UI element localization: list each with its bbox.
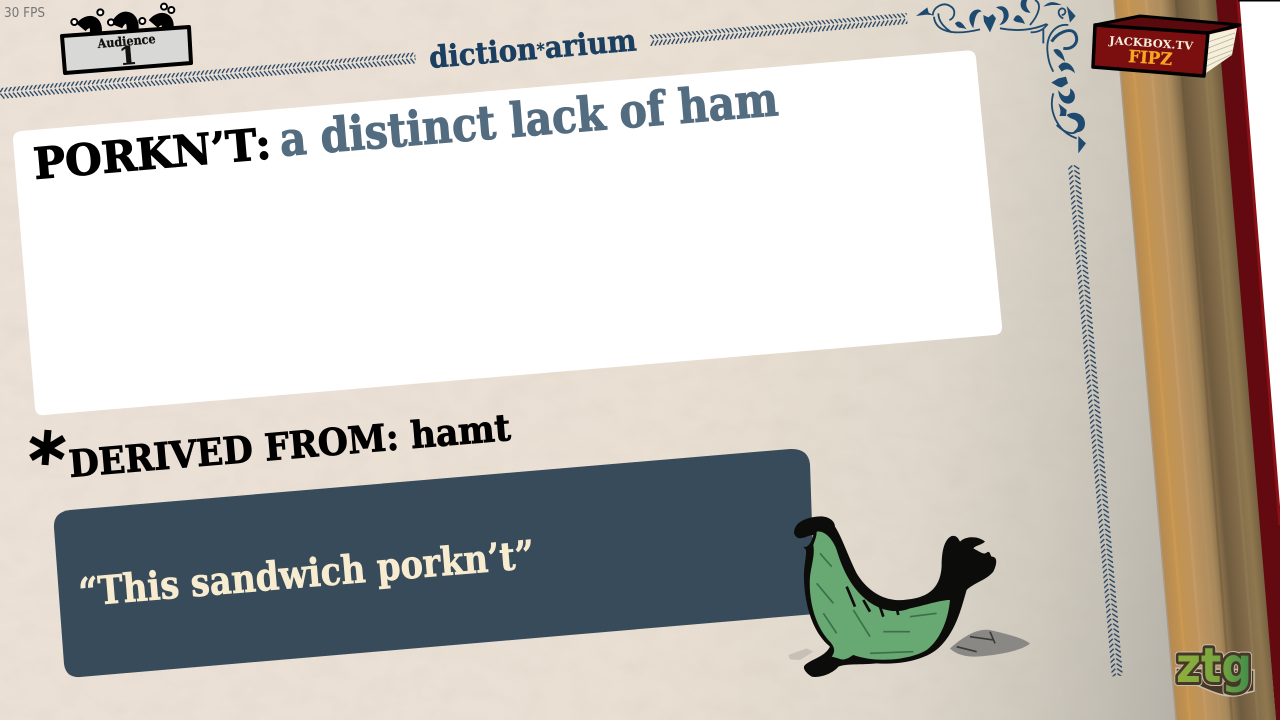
seal body outline (794, 516, 996, 677)
room code book (1093, 16, 1240, 76)
title: arium (543, 23, 638, 66)
audience label: Audience (96, 31, 156, 51)
fps counter: 30 FPS (4, 6, 45, 21)
audience silhouettes (71, 4, 174, 33)
book top (1095, 16, 1240, 33)
seal ground shadows (950, 630, 1030, 657)
example panel (54, 449, 815, 677)
ztg logo: ztg (1176, 638, 1252, 694)
definition text: a distinct lack of ham (277, 72, 780, 168)
corner flourish ornament (916, 0, 1086, 153)
ztg logo: ztg (1176, 638, 1252, 694)
book cover (1093, 25, 1208, 76)
audience badge (62, 4, 191, 73)
title: * (536, 40, 546, 61)
title: diction (428, 31, 548, 76)
seal green fill (810, 531, 950, 660)
badge plate (62, 27, 191, 73)
chevron rule: right of title (650, 13, 908, 46)
room code: FIPZ (1128, 47, 1173, 70)
derived-from asterisk icon (31, 430, 64, 465)
illustration: green seal (788, 516, 1030, 677)
word: PORKN’T: (32, 119, 273, 190)
chevron rule: left of title (0, 52, 416, 99)
example sentence: “This sandwich porkn’t” (77, 532, 536, 616)
jackbox label: JACKBOX.TV (1108, 34, 1194, 53)
ztg logo: ztg (1176, 638, 1252, 694)
chevron rule: right margin (1068, 164, 1123, 677)
definition card (13, 50, 1002, 415)
book pages (1206, 28, 1237, 73)
derived from line: DERIVED FROM: hamt (67, 405, 512, 486)
book spine and cover (1114, 0, 1280, 720)
audience count: 1 (118, 41, 138, 71)
